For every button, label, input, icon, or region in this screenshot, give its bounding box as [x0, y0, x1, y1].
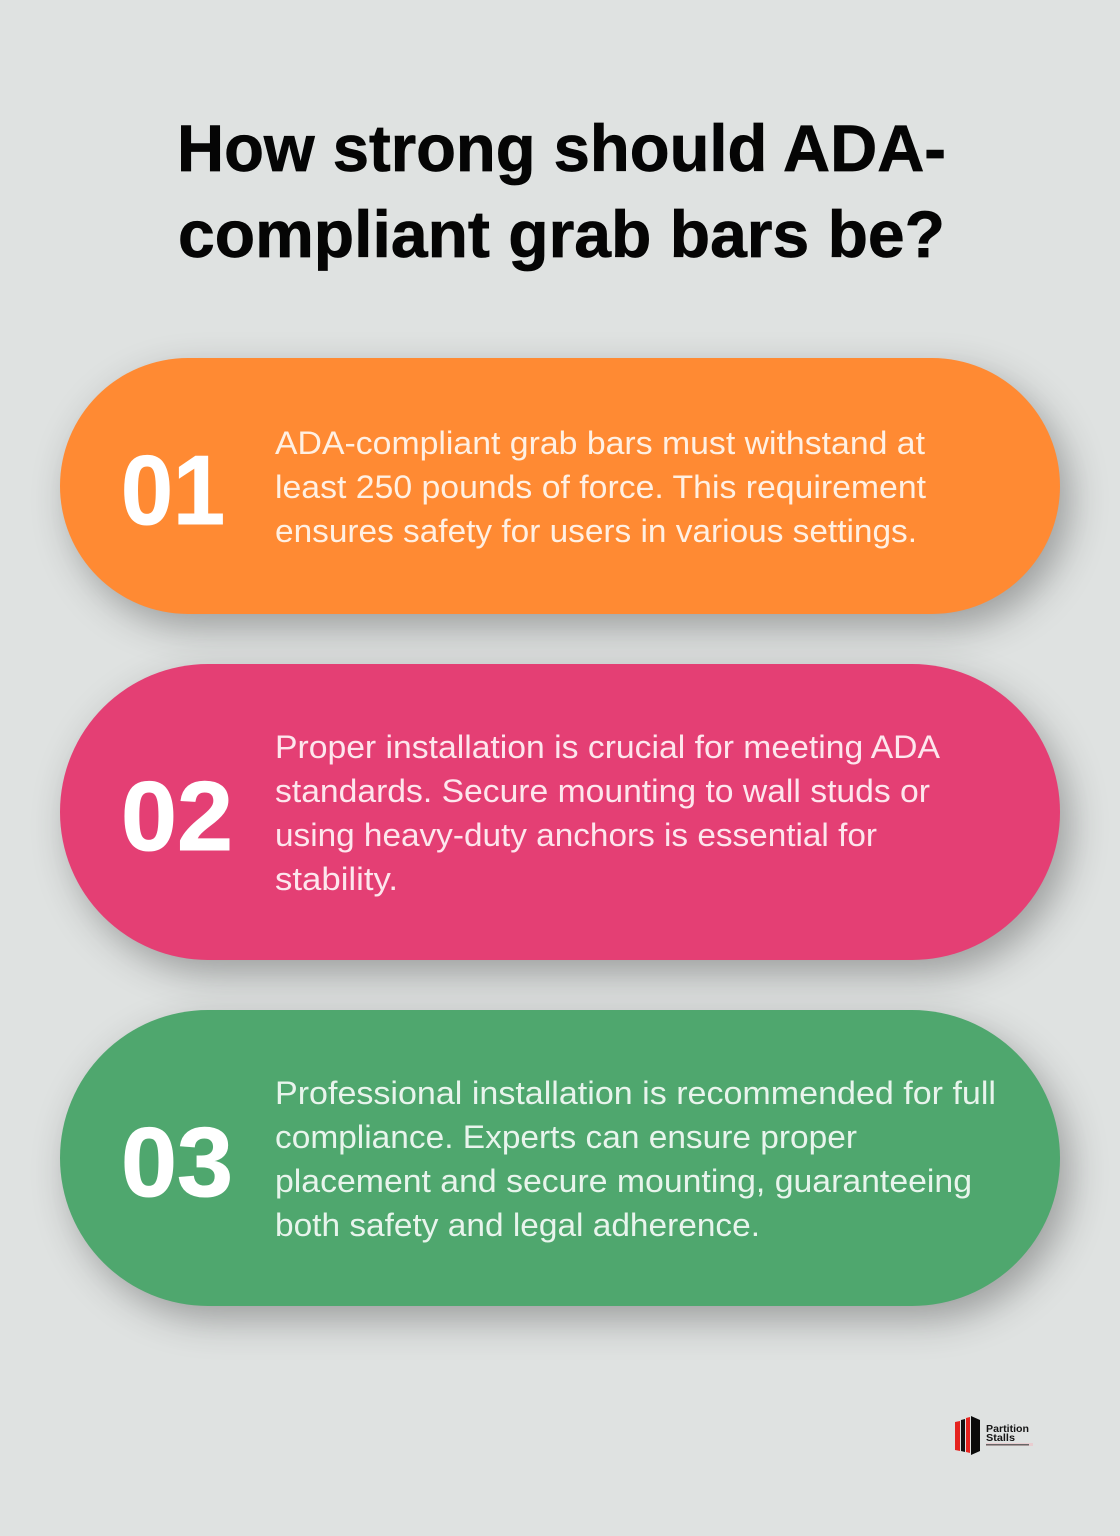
- step 1 number: 01: [121, 435, 225, 545]
- logo wordmark: [986, 1423, 1029, 1444]
- logo tagline strip: [986, 1443, 1033, 1446]
- step 2 text: standards. Secure mounting to wall studs or: [275, 773, 930, 809]
- step 1 text: ensures safety for users in various settings.: [275, 513, 917, 549]
- step 3 text: compliance. Experts can ensure proper: [275, 1119, 857, 1155]
- step 1 text: least 250 pounds of force. This requirement: [275, 469, 926, 505]
- logo: Partition Stalls: [955, 1416, 1033, 1455]
- step 2 text: [275, 729, 940, 897]
- panel: step 3 green pill: [60, 1010, 1060, 1306]
- step 1 text: ADA-compliant grab bars must withstand at: [275, 425, 925, 461]
- panel: step 1 orange pill: [60, 358, 1060, 614]
- icon: partition panels: [955, 1416, 980, 1455]
- title: [177, 111, 946, 271]
- title: compliant grab bars be?: [178, 197, 945, 271]
- step 2 text: stability.: [275, 861, 398, 897]
- step 3 number: 03: [121, 1107, 233, 1217]
- step 3 text: Professional installation is recommended for full: [275, 1075, 996, 1111]
- step 2 text: using heavy-duty anchors is essential for: [275, 817, 877, 853]
- step 3 text: both safety and legal adherence.: [275, 1207, 760, 1243]
- step 2 number: 02: [121, 761, 233, 871]
- title: How strong should ADA-: [177, 111, 946, 185]
- panel: step 2 pink pill: [60, 664, 1060, 960]
- logo wordmark: Partition: [986, 1423, 1029, 1435]
- step 1 text: [275, 425, 926, 549]
- logo wordmark: Stalls: [986, 1432, 1015, 1444]
- step 2 text: Proper installation is crucial for meeting ADA: [275, 729, 940, 765]
- step 3 text: placement and secure mounting, guaranteeing: [275, 1163, 972, 1199]
- step 3 text: [275, 1075, 996, 1243]
